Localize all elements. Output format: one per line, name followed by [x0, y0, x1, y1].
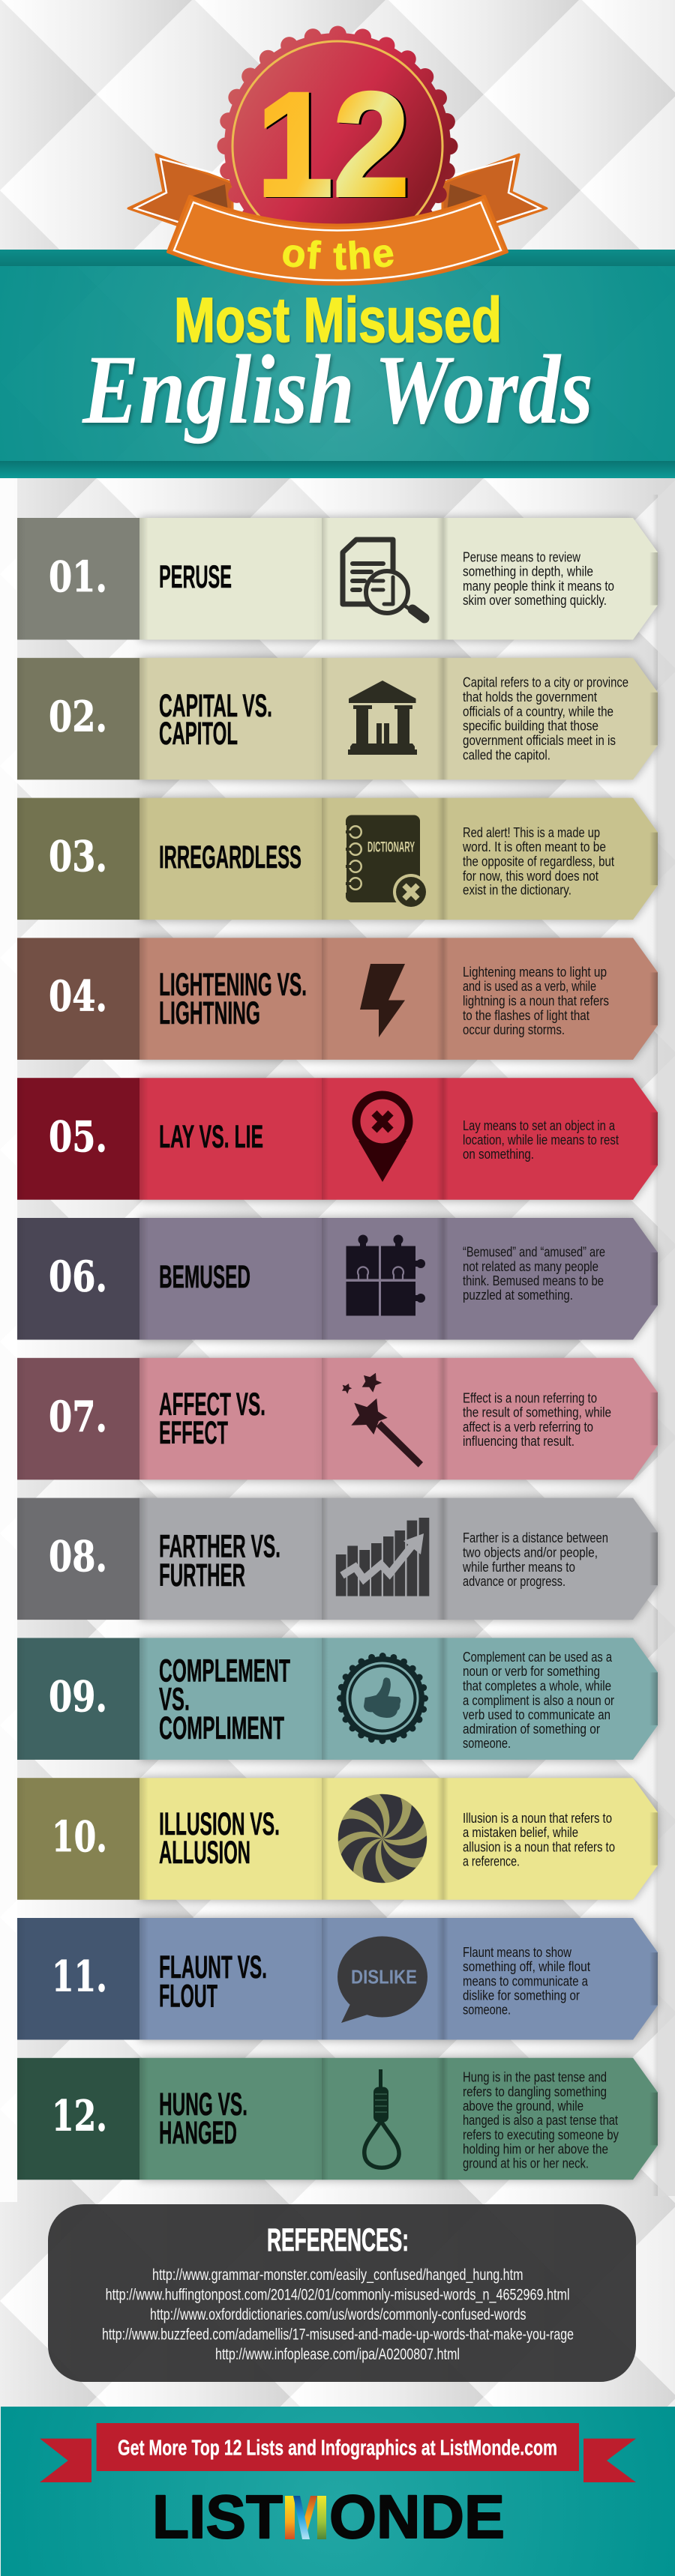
- description: “Bemused” and “amused” are: [463, 1244, 605, 1259]
- number 09: 09.: [49, 1672, 107, 1722]
- description: [462, 825, 614, 898]
- row shadows: [140, 518, 658, 2180]
- description: think. Bemused means to be: [463, 1273, 604, 1288]
- heading: ILLUSION VS.: [159, 1806, 280, 1842]
- description: Hung is in the past tense and: [463, 2070, 607, 2085]
- row 12: hung vs hanged: [17, 2058, 658, 2180]
- scalloped badge: [224, 33, 451, 259]
- heading: AFFECT VS.: [159, 1387, 266, 1423]
- ListMonde logo: ONDE: [329, 2483, 505, 2551]
- description: means to communicate a: [463, 1974, 589, 1989]
- description: Red alert! This is a made up: [463, 825, 600, 840]
- heading: LAY VS. LIE: [159, 1119, 263, 1155]
- description: [463, 1390, 611, 1449]
- heading: COMPLIMENT: [159, 1710, 284, 1746]
- description: influencing that result.: [463, 1434, 574, 1449]
- description: lightning is a noun that refers: [463, 994, 609, 1009]
- description: [463, 965, 609, 1037]
- number 02: 02.: [49, 693, 107, 742]
- description: [462, 1530, 608, 1589]
- icon: dictionary with x: DICTIONARY: [368, 839, 415, 856]
- icon: thumbs up seal: [340, 1656, 424, 1740]
- heading: [159, 1387, 266, 1451]
- number 04: 04.: [49, 971, 107, 1021]
- description: a compliment is also a noun or: [463, 1693, 614, 1708]
- ListMonde logo: LIST: [152, 2483, 283, 2551]
- heading: BEMUSED: [159, 1259, 250, 1295]
- description: while further means to: [462, 1560, 575, 1575]
- description: affect is a verb referring to: [463, 1420, 593, 1435]
- number 07: 07.: [49, 1393, 107, 1442]
- description: something in depth, while: [463, 564, 593, 579]
- heading: LIGHTENING VS.: [159, 967, 307, 1003]
- description: ground at his or her neck.: [463, 2156, 589, 2171]
- heading: CAPITAL VS.: [159, 688, 272, 724]
- row 06: bemused: [17, 1218, 658, 1340]
- heading: COMPLEMENT: [159, 1653, 290, 1689]
- ribbon back tails: [128, 154, 547, 232]
- description: to the flashes of light that: [463, 1008, 590, 1023]
- icon: map pin with x: [352, 1091, 412, 1182]
- heading: ALLUSION: [159, 1835, 250, 1871]
- heading: [159, 967, 307, 1031]
- description: someone.: [463, 1736, 511, 1751]
- number 01: 01.: [49, 552, 107, 602]
- description: admiration of something or: [463, 1722, 600, 1737]
- heading: IRREGARDLESS: [159, 839, 302, 875]
- left margin strip: [0, 478, 17, 2202]
- description: [463, 550, 614, 608]
- row 10: illusion vs allusion: [17, 1778, 658, 1900]
- references heading: REFERENCES:: [267, 2222, 409, 2258]
- heading: HUNG VS.: [159, 2087, 248, 2123]
- icon: lightning bolt: [360, 964, 405, 1037]
- heading: [159, 1529, 280, 1593]
- footer teal band: [1, 2407, 675, 2576]
- heading: HANGED: [159, 2115, 237, 2151]
- description: advance or progress.: [463, 1574, 566, 1589]
- icon: government building: [348, 681, 417, 755]
- panel: references: [48, 2204, 636, 2382]
- description: someone.: [463, 2003, 511, 2018]
- number 06: 06.: [49, 1252, 107, 1301]
- description: specific building that those: [463, 719, 598, 734]
- heading: FARTHER VS.: [159, 1529, 280, 1565]
- number 08: 08.: [49, 1532, 107, 1581]
- description: many people think it means to: [463, 579, 614, 594]
- heading: FLOUT: [159, 1979, 218, 2015]
- footer banner: [40, 2423, 636, 2482]
- icon: dictionary with x: [341, 815, 429, 910]
- number 10: 10.: [52, 1812, 107, 1862]
- description: dislike for something or: [463, 1988, 580, 2003]
- references links: http://www.grammar-monster.com/easily_confused/hanged_hung.htm: [152, 2266, 524, 2284]
- description: the result of something, while: [463, 1405, 611, 1420]
- heading: [159, 2087, 248, 2151]
- row 02: capital vs capitol: [17, 658, 658, 779]
- description: a reference.: [463, 1854, 520, 1869]
- references links: [102, 2266, 574, 2363]
- description: Farther is a distance between: [463, 1530, 608, 1545]
- description: for now, this word does not: [463, 869, 598, 884]
- heading: VS.: [159, 1682, 190, 1718]
- heading: LIGHTNING: [159, 995, 260, 1031]
- icon: dislike speech bubble: DISLIKE: [351, 1965, 417, 1988]
- description: [463, 1118, 619, 1162]
- row 08: farther vs further: [17, 1498, 658, 1620]
- description: Complement can be used as a: [463, 1650, 613, 1665]
- heading: FURTHER: [159, 1557, 245, 1593]
- description: exist in the dictionary.: [463, 883, 572, 898]
- row 09: complement vs compliment: [17, 1638, 658, 1760]
- ribbon fold shadows: [191, 184, 484, 211]
- icon: dislike speech bubble: [338, 1937, 428, 2023]
- heading: CAPITOL: [159, 716, 238, 752]
- description: hanged is also a past tense that: [463, 2113, 618, 2128]
- description: holding him or her above the: [463, 2142, 608, 2157]
- title: Most Misused: Most Misused: [174, 285, 502, 355]
- description: [463, 675, 628, 762]
- right margin strip: [652, 480, 675, 2196]
- description: [463, 1650, 614, 1751]
- row 04: lightening vs lightning: [17, 938, 658, 1060]
- description: refers to dangling something: [463, 2084, 607, 2099]
- front ribbon: [166, 195, 508, 286]
- description: on something.: [463, 1147, 534, 1162]
- header teal band: [0, 250, 675, 478]
- description: occur during storms.: [463, 1022, 565, 1037]
- description: location, while lie means to rest: [463, 1132, 619, 1147]
- references links: http://www.oxforddictionaries.com/us/words/commonly-confused-words: [150, 2306, 526, 2323]
- heading: FLAUNT VS.: [159, 1949, 267, 1985]
- description: that completes a whole, while: [463, 1679, 611, 1694]
- description: not related as many people: [463, 1259, 598, 1274]
- row 07: affect vs effect: [17, 1358, 658, 1479]
- number 12: 12.: [52, 2091, 107, 2141]
- row 03: irregardless: [17, 798, 658, 920]
- description: Capital refers to a city or province: [463, 675, 628, 690]
- description: allusion is a noun that refers to: [463, 1839, 615, 1854]
- row 05: lay vs lie: [17, 1078, 658, 1200]
- description: skim over something quickly.: [463, 593, 607, 608]
- description: [463, 1945, 590, 2018]
- heading: [159, 688, 272, 752]
- icon: noose: [364, 2069, 399, 2168]
- icon: swirl candy: [337, 1793, 428, 1884]
- heading: PERUSE: [159, 559, 232, 595]
- description: noun or verb for something: [463, 1664, 600, 1679]
- row 11: flaunt vs flout: [17, 1918, 658, 2040]
- of the: of the: [283, 240, 394, 270]
- ListMonde logo: [152, 2483, 505, 2551]
- description: government officials meet in is: [463, 733, 616, 748]
- icon: document and magnifier: [343, 540, 424, 618]
- heading: [159, 1653, 290, 1746]
- description: puzzled at something.: [463, 1288, 573, 1303]
- description: Lay means to set an object in a: [463, 1118, 616, 1133]
- description: above the ground, while: [463, 2099, 584, 2114]
- icon: puzzle pieces: [346, 1235, 425, 1316]
- heading: [159, 1949, 267, 2015]
- description: the opposite of regardless, but: [463, 854, 614, 869]
- icon: magic wand and stars: [342, 1373, 423, 1468]
- description: officials of a country, while the: [463, 704, 614, 719]
- description: [463, 1244, 605, 1303]
- description: [463, 1811, 615, 1869]
- row 01: peruse: [17, 518, 658, 640]
- description: word. It is often meant to be: [462, 839, 606, 854]
- number 05: 05.: [49, 1112, 107, 1162]
- description: something off, while flout: [463, 1959, 590, 1974]
- heading: [159, 1806, 280, 1871]
- description: verb used to communicate an: [463, 1707, 610, 1722]
- description: Lightening means to light up: [463, 965, 607, 980]
- description: that holds the government: [463, 690, 597, 705]
- number 11: 11.: [52, 1952, 107, 2001]
- description: called the capitol.: [463, 747, 550, 762]
- references links: http://www.infoplease.com/ipa/A0200807.html: [215, 2346, 460, 2363]
- description: Peruse means to review: [463, 550, 581, 565]
- number 03: 03.: [49, 832, 107, 881]
- heading: EFFECT: [159, 1415, 228, 1451]
- description: refers to executing someone by: [463, 2127, 619, 2142]
- icon: rising bar chart with arrow: [336, 1518, 429, 1596]
- description: Illusion is a noun that refers to: [463, 1811, 612, 1826]
- number 12: 12: [256, 61, 410, 227]
- title: English Words: English Words: [82, 334, 593, 444]
- description: Flaunt means to show: [463, 1945, 572, 1960]
- description: a mistaken belief, while: [463, 1825, 578, 1840]
- description: and is used as a verb, while: [463, 979, 596, 994]
- description: [463, 2070, 619, 2171]
- description: Effect is a noun referring to: [463, 1390, 597, 1405]
- description: two objects and/or people,: [463, 1545, 598, 1560]
